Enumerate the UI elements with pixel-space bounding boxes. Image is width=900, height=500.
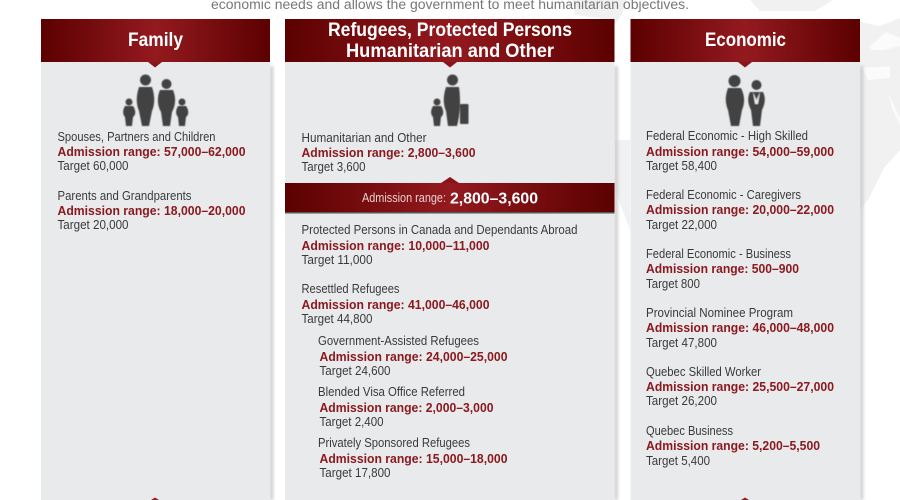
bottom marker (741, 498, 749, 500)
text: Blended Visa Office Referred: Target 2,400 (320, 414, 384, 429)
header: Economic (630, 19, 860, 68)
text: Provincial Nominee Program: Target 47,800 (646, 335, 717, 350)
text: Provincial Nominee Program: Admission range: 46,000–48,000 (646, 320, 834, 335)
text: Privately Sponsored Refugees: Target 17,800 (320, 465, 390, 480)
text: Government-Assisted Refugees: Government-Assisted Refugees (318, 333, 479, 348)
text: Spouses, Partners and Children: Target 60,000 (58, 158, 128, 173)
header: Family (41, 19, 270, 68)
background world map (573, 0, 900, 230)
text: Humanitarian and Other (302, 130, 476, 174)
band: total admission range: 2,800–3,600 (450, 190, 538, 208)
text: Federal Economic - Caregivers (646, 187, 834, 232)
text: Privately Sponsored Refugees (318, 435, 508, 480)
text: Federal Economic - High Skilled: Admission range: 54,000–59,000 (646, 144, 834, 159)
text: Quebec Skilled Worker: Target 26,200 (646, 393, 717, 408)
header: Refugees: Humanitarian and Other (346, 41, 555, 62)
text: Quebec Skilled Worker: Quebec Skilled Worker (646, 364, 762, 379)
text: Quebec Business (646, 423, 820, 468)
bottom marker (151, 498, 159, 500)
icon: adult and child with suitcase (431, 74, 468, 126)
header: Refugees (285, 19, 614, 68)
text: Resettled Refugees: Admission range: 41,000–46,000 (302, 297, 490, 312)
text: Parents and Grandparents: Parents and Grandparents (58, 188, 192, 203)
text: Privately Sponsored Refugees: Admission range: 15,000–18,000 (320, 451, 508, 466)
text: Government-Assisted Refugees (318, 333, 508, 378)
text: Spouses, Partners and Children: Spouses, Partners and Children (58, 129, 216, 144)
text: Parents and Grandparents: Admission range: 18,000–20,000 (58, 203, 246, 218)
text: Humanitarian and Other: Admission range: 2,800–3,600 (302, 145, 476, 160)
text: Protected Persons: Target 11,000 (302, 252, 372, 267)
text: Federal Economic - High Skilled: Federal Economic - High Skilled (646, 128, 808, 143)
text: Spouses, Partners and Children (58, 129, 246, 173)
text: Federal Economic - Business: Target 800 (646, 276, 700, 291)
text: Quebec Business: Quebec Business (646, 423, 733, 438)
text: Protected Persons (302, 222, 578, 267)
text: Quebec Skilled Worker (646, 364, 834, 408)
text: Quebec Business: Admission range: 5,200–5,500 (646, 438, 820, 453)
text: Blended Visa Office Referred: Blended Visa Office Referred (318, 384, 465, 399)
text: Parents and Grandparents (58, 188, 246, 232)
text: Government-Assisted Refugees: Target 24,600 (320, 363, 390, 378)
text: Federal Economic - Business: Federal Economic - Business (646, 246, 791, 261)
header: Family: Family (128, 30, 183, 51)
text: Protected Persons: Admission range: 10,000–11,000 (302, 238, 490, 253)
text: Protected Persons: Protected Persons in Canada and Dependants Abroad (302, 222, 578, 237)
text: Humanitarian and Other: Humanitarian and Other (302, 130, 427, 145)
icon: family (123, 74, 188, 126)
text: Federal Economic - Caregivers: Target 22,000 (646, 217, 717, 232)
text: Resettled Refugees: Target 44,800 (302, 311, 372, 326)
text: Quebec Skilled Worker: Admission range: 25,500–27,000 (646, 379, 834, 394)
text: Federal Economic - Caregivers: Federal Economic - Caregivers (646, 187, 801, 202)
text: Government-Assisted Refugees: Admission range: 24,000–25,000 (320, 349, 508, 364)
header: Economic: Economic (705, 30, 786, 51)
band: total admission range (285, 177, 614, 214)
text: Quebec Business: Target 5,400 (646, 453, 710, 468)
text: Humanitarian and Other: Target 3,600 (302, 159, 366, 174)
panel: Refugees, Protected Persons, Humanitarian and Other (285, 19, 618, 500)
text: Provincial Nominee Program: Provincial Nominee Program (646, 305, 793, 320)
text: Privately Sponsored Refugees: Privately Sponsored Refugees (318, 435, 470, 450)
text: Federal Economic - High Skilled (646, 128, 834, 173)
text: Resettled Refugees: Resettled Refugees (302, 281, 400, 296)
text: Spouses, Partners and Children: Admission range: 57,000–62,000 (58, 144, 246, 159)
text: Provincial Nominee Program (646, 305, 834, 350)
icon: two workers (726, 75, 765, 126)
text: Federal Economic - Business (646, 246, 799, 291)
header: Refugees: Refugees, Protected Persons (328, 20, 572, 41)
text: Federal Economic - High Skilled: Target 58,400 (646, 158, 717, 173)
band: total admission range: Admission range: (362, 191, 446, 205)
text: Parents and Grandparents: Target 20,000 (58, 217, 128, 232)
panel: Family (41, 19, 273, 500)
text: Blended Visa Office Referred (318, 384, 494, 429)
text: Federal Economic - Caregivers: Admission range: 20,000–22,000 (646, 202, 834, 217)
text: Blended Visa Office Referred: Admission range: 2,000–3,000 (320, 400, 494, 415)
text: Resettled Refugees (302, 281, 490, 326)
panel: Economic (630, 19, 863, 500)
text: Federal Economic - Business: Admission range: 500–900 (646, 261, 799, 276)
